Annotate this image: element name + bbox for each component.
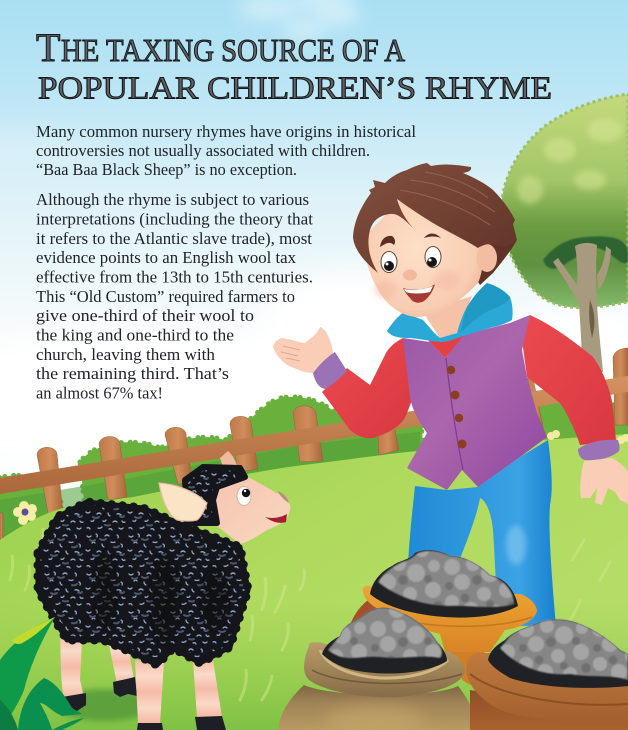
explanation paragraph: interpretations (including the theory that xyxy=(36,210,313,228)
wool mound in orange pot xyxy=(370,550,518,618)
boy nose xyxy=(403,270,417,280)
sky background xyxy=(0,0,628,560)
bush shading xyxy=(0,432,420,548)
small flowers right xyxy=(547,430,628,444)
explanation paragraph: it refers to the Atlantic slave trade), most xyxy=(36,229,312,248)
front ear xyxy=(159,483,207,521)
explanation paragraph: church, leaving them with xyxy=(36,345,216,364)
boy hair xyxy=(353,163,517,273)
back ear xyxy=(220,451,239,470)
title: HE TAXING SOURCE OF A xyxy=(61,32,405,68)
wool mound in brown pot xyxy=(488,620,628,688)
tree shadow foliage xyxy=(543,236,628,269)
red shirt V xyxy=(428,335,464,358)
intro paragraph: controversies not usually associated with children. xyxy=(36,141,370,160)
fence posts xyxy=(0,348,628,540)
ground shadow xyxy=(55,689,155,721)
intro paragraph xyxy=(36,122,416,179)
sheep wool shading xyxy=(95,550,229,645)
boy cheeks xyxy=(373,270,460,299)
sheep mouth xyxy=(265,514,287,523)
explanation paragraph: give one-third of their wool to xyxy=(36,306,254,325)
boy left sleeve xyxy=(322,338,414,438)
fence rail xyxy=(0,376,628,494)
wooden fence xyxy=(0,348,628,540)
meadow ground xyxy=(0,434,628,730)
back legs and hooves xyxy=(60,635,137,713)
leafy plant xyxy=(0,617,84,730)
tree xyxy=(501,94,628,372)
wool mound in tan pot xyxy=(322,608,447,674)
boy right sleeve xyxy=(522,315,616,445)
grass tufts xyxy=(10,529,610,700)
title xyxy=(36,25,552,106)
boy left hand xyxy=(273,327,333,373)
clouds xyxy=(0,0,628,472)
vest buttons xyxy=(447,366,466,448)
explanation paragraph: This “Old Custom” required farmers to xyxy=(36,287,295,306)
explanation paragraph: an almost 67% tax! xyxy=(36,384,163,402)
boy mouth xyxy=(403,284,435,303)
sheep head wool xyxy=(185,467,245,523)
boy neck xyxy=(423,296,472,340)
boy face xyxy=(365,195,483,317)
tree foliage mottling xyxy=(517,118,623,204)
boy right hand xyxy=(580,458,628,505)
bushes xyxy=(0,397,628,545)
orange pot xyxy=(350,586,537,685)
boy xyxy=(273,163,628,626)
explanation paragraph: effective from the 13th to 15th centuries. xyxy=(36,268,313,286)
boy jeans xyxy=(408,440,556,626)
tree trunk xyxy=(553,243,603,372)
boy blue collar xyxy=(387,283,513,342)
boy eyes xyxy=(381,246,441,272)
intro paragraph: “Baa Baa Black Sheep” is no exception. xyxy=(36,160,297,179)
boy ear xyxy=(477,244,497,272)
title: T xyxy=(36,25,60,70)
sheep xyxy=(38,451,290,730)
boy right cuff xyxy=(578,440,620,460)
tan pot xyxy=(278,642,477,730)
explanation paragraph: Although the rhyme is subject to various xyxy=(36,190,309,209)
intro paragraph: Many common nursery rhymes have origins in historical xyxy=(36,122,416,141)
boy hair back behind ear xyxy=(470,225,517,285)
sheep head xyxy=(207,473,290,544)
boy eyebrows xyxy=(380,233,441,247)
boy vest xyxy=(403,315,547,490)
brown pot xyxy=(466,653,628,730)
vest placket line xyxy=(446,358,463,470)
sheep eye xyxy=(237,486,251,506)
explanation paragraph: the king and one-third to the xyxy=(36,326,234,344)
title: POPULAR CHILDREN’S RHYME xyxy=(38,70,552,106)
tree crown xyxy=(501,94,628,308)
sheep body wool xyxy=(38,502,248,665)
explanation paragraph xyxy=(36,190,313,402)
front legs and hooves xyxy=(135,660,226,730)
explanation paragraph: the remaining third. That’s xyxy=(36,364,229,383)
sheep muzzle xyxy=(278,491,289,503)
small flower left xyxy=(13,501,37,525)
explanation paragraph: evidence points to an English wool tax xyxy=(36,248,297,267)
boy left cuff xyxy=(313,352,347,389)
